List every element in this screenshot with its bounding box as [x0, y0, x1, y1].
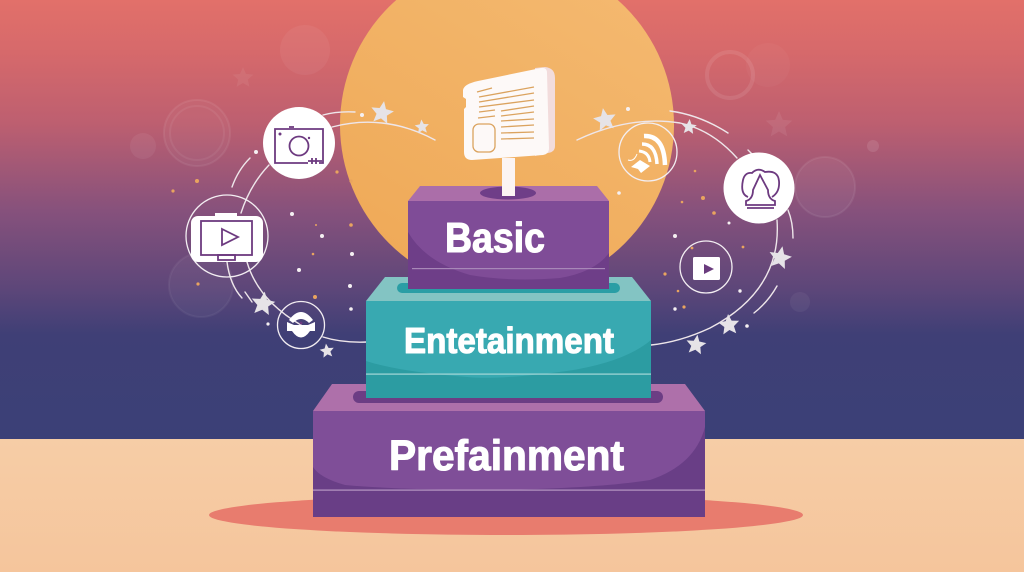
scattered dots: [171, 107, 749, 328]
sun circle: [340, 0, 674, 292]
icon: headset robot: [278, 302, 324, 348]
icon: camera: [263, 107, 335, 179]
background gradient sky: [0, 0, 1024, 440]
icon: play badge: [680, 241, 732, 293]
label: Basic: Basic: [445, 214, 545, 261]
icon: chef hat: [724, 152, 794, 224]
label: Prefainment: Prefainment: [389, 432, 624, 480]
decorative faint rings and stars: [130, 25, 879, 317]
tier 1: Basic: [408, 186, 609, 289]
icon: rss signal: [619, 123, 677, 181]
label: Entertainment: Entetainment: [404, 320, 614, 361]
tier 2: Entertainment: [366, 277, 651, 398]
icon: video screen: [186, 195, 268, 277]
floor: [0, 439, 1024, 572]
orbit arcs: [227, 111, 793, 345]
floor shadow ellipse: [209, 495, 803, 535]
icon: news sign on a pole: [463, 67, 555, 196]
tier 3: Prefainment: [313, 384, 705, 517]
stars on the orbit: [250, 99, 794, 358]
